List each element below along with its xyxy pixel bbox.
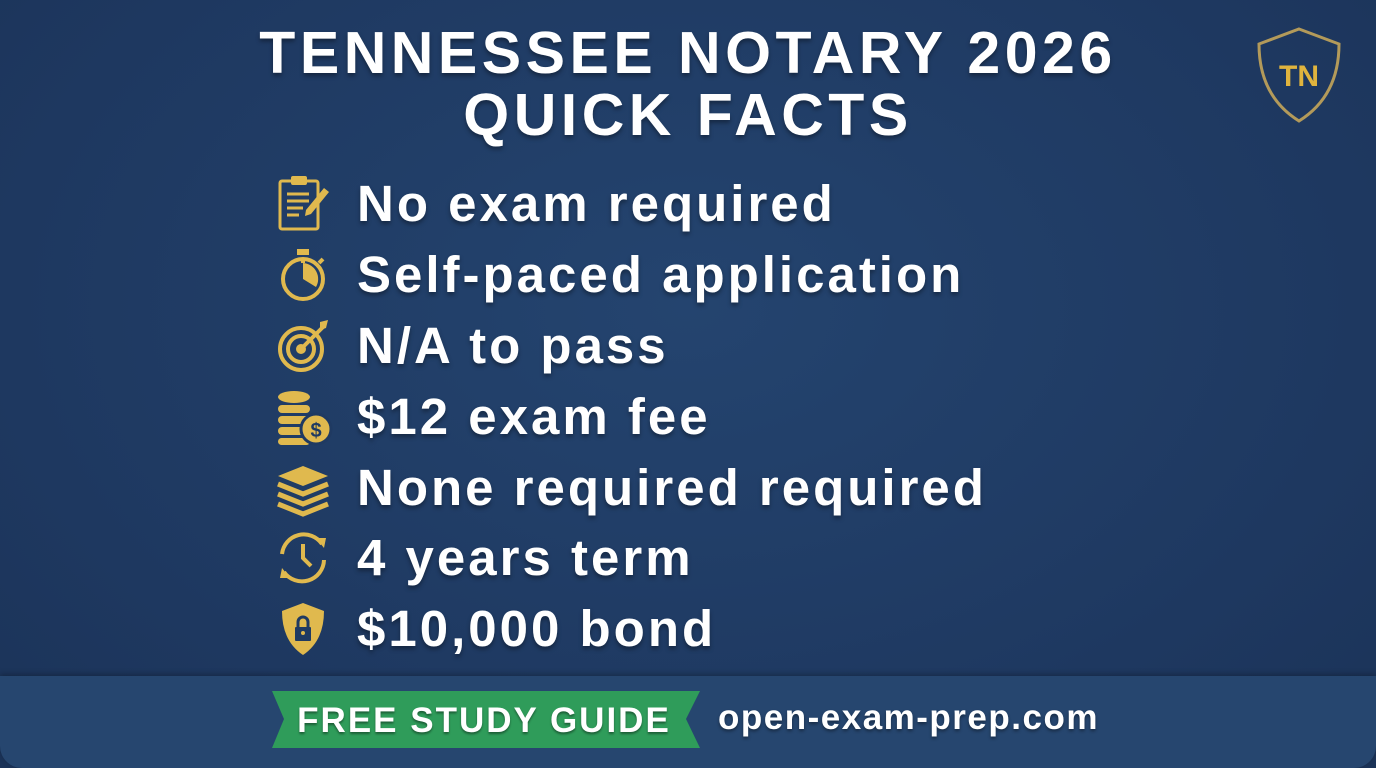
- fact 5: [277, 458, 987, 520]
- title: QUICK FACTS: [463, 82, 913, 148]
- text: N/A to pass: [357, 316, 669, 374]
- text: 4 years term: [357, 528, 694, 586]
- text: None required required: [357, 458, 987, 516]
- fact 6: [280, 528, 694, 590]
- fact 4: [278, 388, 711, 445]
- text: Self-paced application: [357, 246, 964, 302]
- fact 1: [278, 174, 836, 236]
- footer band: [0, 676, 1376, 768]
- badge: TN shield: TN: [1279, 60, 1319, 93]
- fact 4: $: [310, 420, 322, 442]
- text: $12 exam fee: [357, 388, 711, 444]
- fact 7: [282, 600, 716, 658]
- ribbon: free study guide: FREE STUDY GUIDE: [297, 701, 671, 740]
- fact 2: [281, 246, 964, 307]
- text: No exam required: [357, 174, 836, 232]
- footer url: open-exam-prep.com: [718, 698, 1099, 737]
- fact 3: [278, 316, 669, 378]
- text: $10,000 bond: [357, 600, 716, 656]
- title: [258, 20, 1117, 151]
- title: TENNESSEE NOTARY 2026: [259, 20, 1117, 86]
- badge: TN shield: [1258, 27, 1340, 123]
- ribbon: free study guide: [272, 691, 700, 748]
